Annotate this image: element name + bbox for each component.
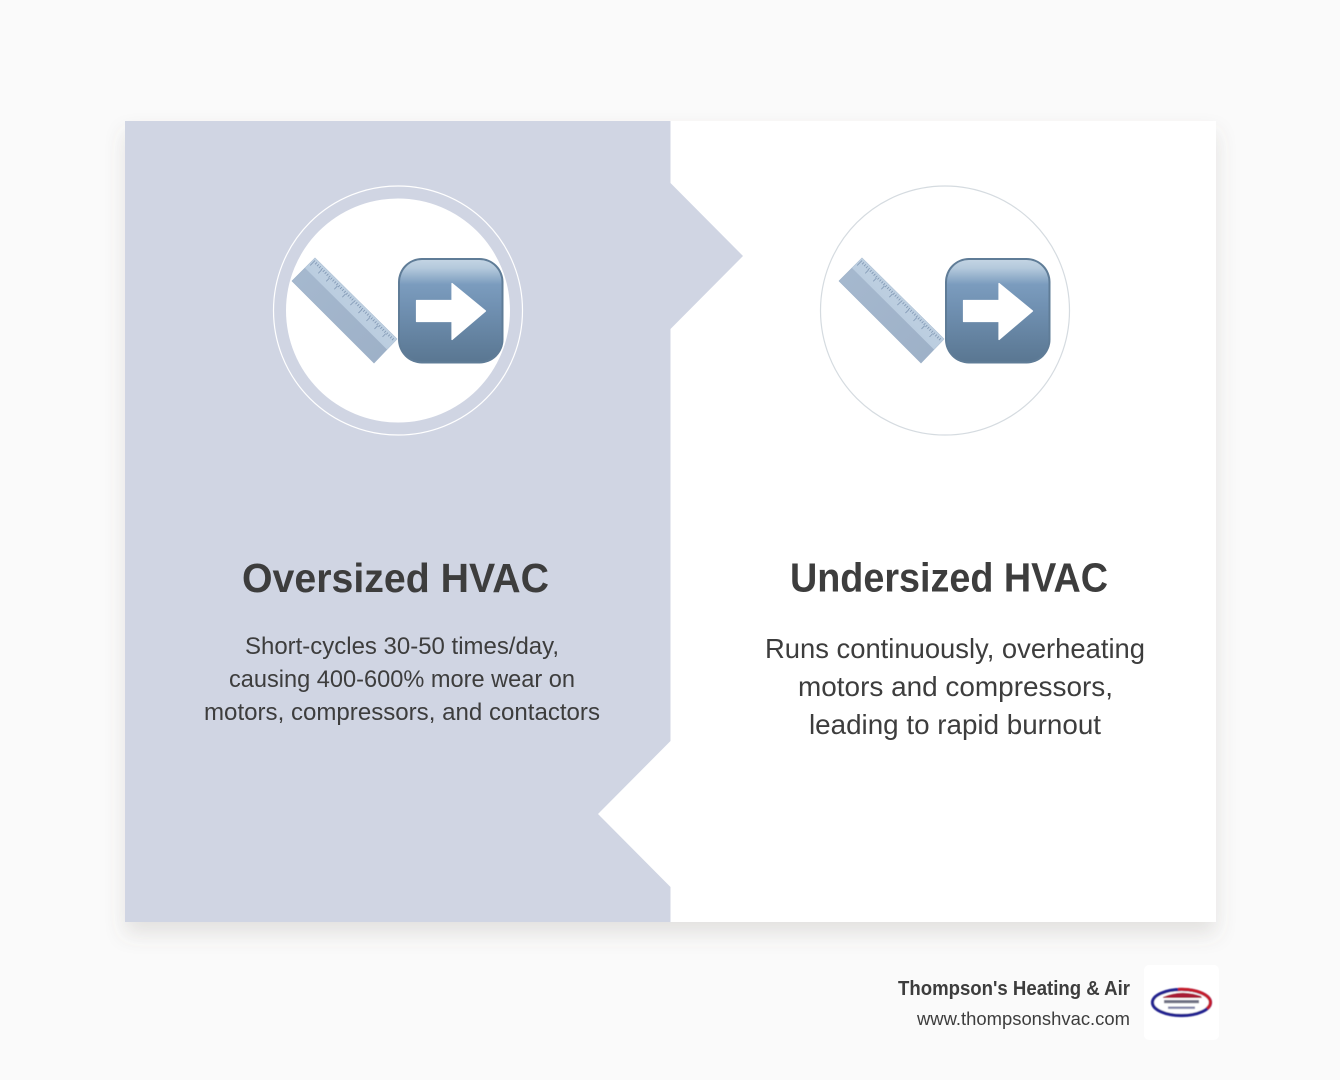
panel: oversized HVAC [125,121,743,922]
panel: undersized HVAC [765,186,1145,740]
icon: ruler [292,258,397,363]
left panel background with arrow tab and notch [125,121,743,922]
heading: Oversized HVAC: Oversized HVAC [242,555,549,601]
text block: undersized description: leading to rapid burnout [809,709,1101,740]
icon: right arrow button [945,258,1050,364]
text block: oversized description: Short-cycles 30-50 times/day, [245,633,559,660]
logo [1144,965,1219,1040]
company name: Thompson's Heating & Air [898,978,1130,1000]
text block: oversized description: motors, compressors, and contactors [204,699,600,726]
text block: oversized description: causing 400-600% more wear on [229,666,575,693]
icon: ruler [839,258,944,363]
text block: undersized description: motors and compressors, [798,671,1113,702]
text block: undersized description [765,633,1145,740]
company website: www.thompsonshvac.com [916,1009,1130,1029]
icon circle: undersized [820,186,1070,435]
icon: right arrow button [398,258,504,364]
text block: oversized description [204,633,600,726]
heading: Undersized HVAC: Undersized HVAC [790,554,1108,600]
footer: company brand [898,965,1219,1040]
card background [125,121,1216,922]
text block: undersized description: Runs continuously, overheating [765,633,1145,664]
icon circle: oversized [274,186,522,435]
